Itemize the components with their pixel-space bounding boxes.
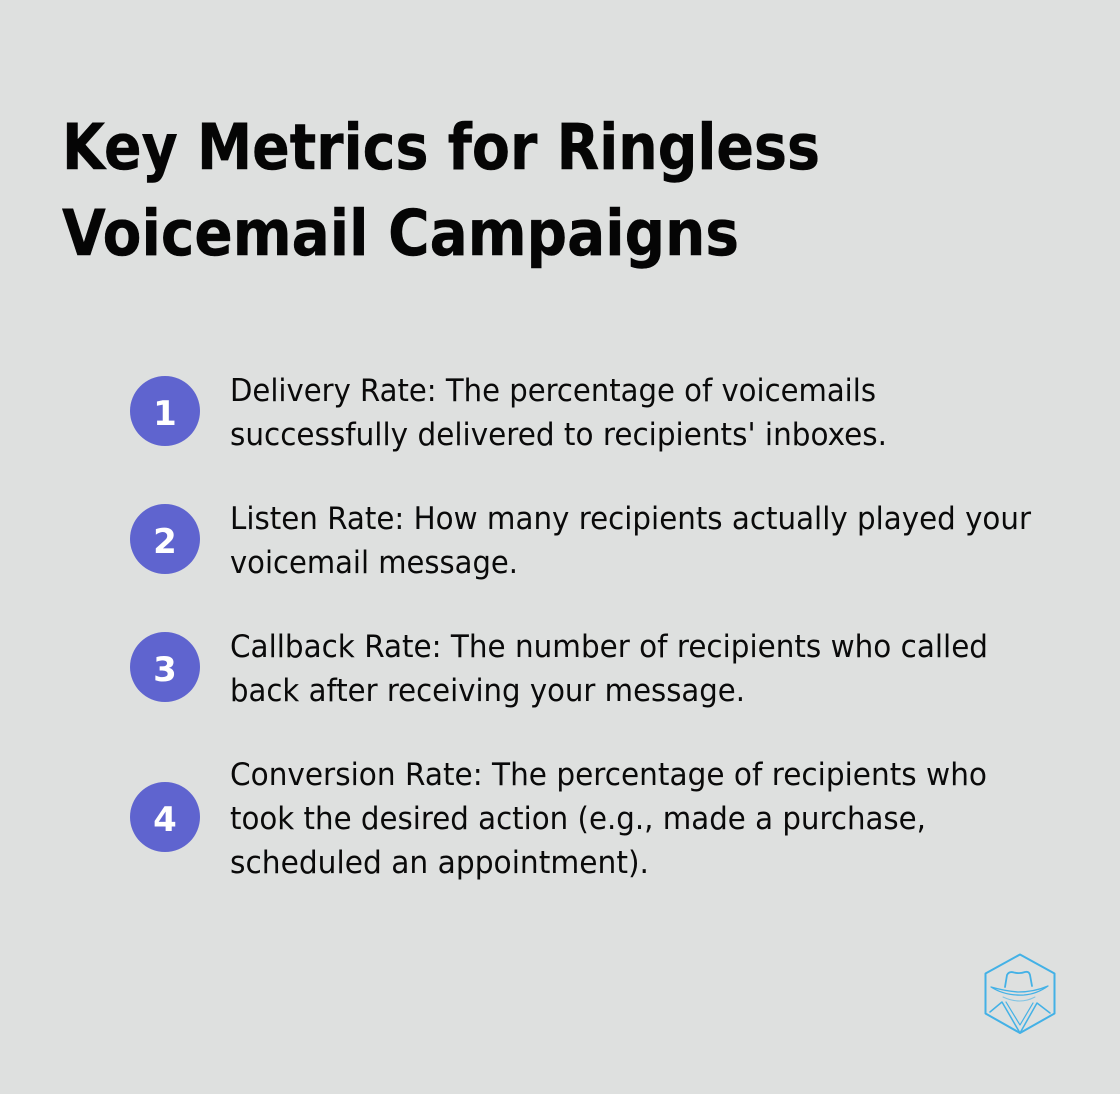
list item 2: listen rate — [130, 501, 1031, 581]
text: listen rate: Listen Rate: How many recipients actually played your — [230, 501, 1031, 537]
list item 3: callback rate — [130, 629, 988, 709]
text: conversion rate: scheduled an appointment). — [230, 845, 649, 881]
title — [62, 111, 820, 270]
text: conversion rate — [230, 757, 987, 881]
title: Voicemail Campaigns — [62, 197, 739, 270]
text: listen rate — [230, 501, 1031, 581]
text: callback rate: back after receiving your message. — [230, 673, 745, 709]
number badge 2: 2 — [153, 522, 177, 562]
text: callback rate — [230, 629, 988, 709]
list item 1: delivery rate — [130, 373, 887, 453]
text: conversion rate: Conversion Rate: The percentage of recipients who — [230, 757, 987, 793]
number badge 4: 4 — [153, 800, 177, 840]
number badge 1 — [130, 376, 200, 446]
number badge 3 — [130, 632, 200, 702]
number badge 4 — [130, 782, 200, 852]
text: delivery rate — [230, 373, 887, 453]
number badge 2 — [130, 504, 200, 574]
number badge 3: 3 — [153, 650, 177, 690]
icon: hexagon logo with hat and collar — [986, 954, 1054, 1033]
text: delivery rate: Delivery Rate: The percentage of voicemails — [230, 373, 876, 409]
list item 4: conversion rate — [130, 757, 987, 881]
text: delivery rate: successfully delivered to recipients' inboxes. — [230, 417, 887, 453]
number badge 1: 1 — [153, 394, 177, 434]
text: conversion rate: took the desired action (e.g., made a purchase, — [230, 801, 926, 837]
text: listen rate: voicemail message. — [230, 545, 518, 581]
text: callback rate: Callback Rate: The number of recipients who called — [230, 629, 988, 665]
title: Key Metrics for Ringless — [62, 111, 820, 184]
